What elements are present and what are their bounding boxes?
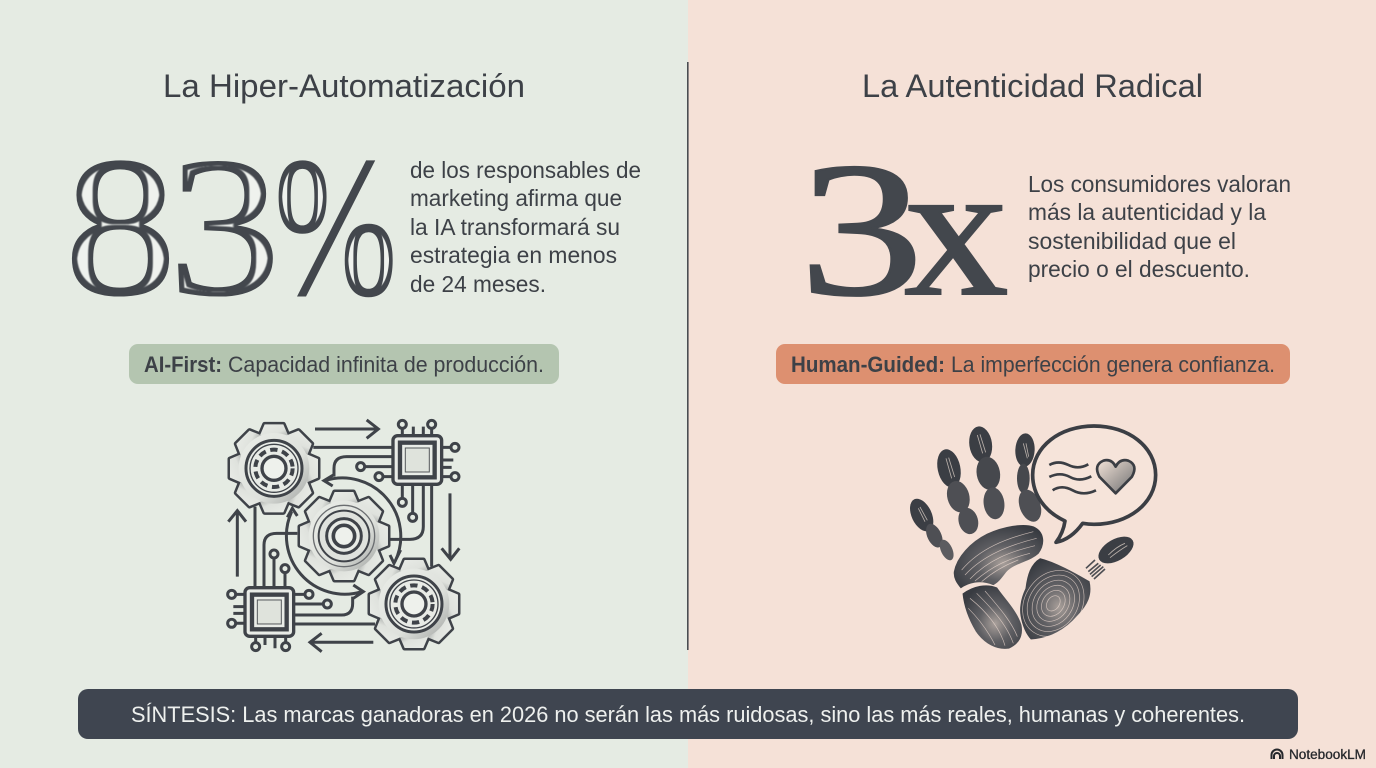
callout: AI-First — [129, 344, 559, 384]
icon: handprint with speech bubble — [905, 425, 1156, 649]
arrows around gears — [228, 420, 459, 652]
palm print — [953, 524, 1091, 649]
handprint fingers — [905, 425, 1138, 569]
heading: right: La Autenticidad Radical — [862, 68, 1203, 104]
callout: Human-Guided: La imperfección genera confianza. — [951, 352, 1275, 377]
circuit wires — [228, 420, 459, 651]
gear: bottom right — [370, 560, 458, 648]
big statistic: 83%: % — [274, 117, 397, 338]
fingertip highlights — [918, 434, 1127, 579]
palm ridge lines — [962, 532, 1097, 648]
bubble wavy lines — [1049, 462, 1096, 493]
text block: right statistic description: más la autenticidad y la — [1028, 199, 1266, 225]
synthesis banner: SÍNTESIS: Las marcas ganadoras en 2026 no serán las más ruidosas, sino las más reales, humanas y coherentes. — [131, 702, 1245, 727]
text block: left statistic description: de 24 meses. — [410, 271, 546, 297]
text block: left statistic description: de los responsables de — [410, 157, 641, 183]
chip: top right — [393, 436, 442, 484]
center divider line — [687, 62, 689, 650]
icon: gears, chips and circuit arrows — [228, 420, 459, 652]
big statistic: 3x: x — [904, 123, 1009, 336]
callout: Human-Guided — [776, 344, 1290, 384]
callout: AI-First: Capacidad infinita de producción. — [228, 352, 544, 377]
chip: bottom left — [245, 588, 294, 636]
speech bubble — [1033, 426, 1156, 542]
big statistic: 3x: 3 — [799, 123, 924, 336]
heading: left: La Hiper-Automatización — [163, 68, 525, 104]
big statistic: 3x — [799, 123, 1009, 336]
panel: right background — [688, 0, 1376, 768]
text block: right statistic description — [1028, 171, 1291, 282]
big statistic: 83%: 3 — [168, 117, 281, 338]
text block: left statistic description: estrategia en menos — [410, 242, 617, 268]
big statistic: 83%: 8 — [64, 117, 177, 338]
gear: top left — [230, 424, 318, 512]
synthesis banner — [78, 689, 1298, 739]
panel: left background — [0, 0, 688, 768]
NotebookLM logo: NotebookLM — [1289, 747, 1366, 762]
big statistic: 83% — [64, 117, 397, 338]
text block: right statistic description: precio o el descuento. — [1028, 256, 1250, 282]
text block: right statistic description: sostenibilidad que el — [1028, 228, 1236, 254]
callout: AI-First: AI-First: — [144, 352, 222, 377]
callout: Human-Guided: Human-Guided: — [791, 352, 945, 377]
text block: left statistic description: marketing afirma que — [410, 185, 622, 211]
text block: right statistic description: Los consumidores valoran — [1028, 171, 1291, 197]
text block: left statistic description: la IA transformará su — [410, 214, 620, 240]
gear: center — [300, 492, 388, 580]
heart — [1097, 460, 1134, 493]
text block: left statistic description — [410, 157, 641, 297]
